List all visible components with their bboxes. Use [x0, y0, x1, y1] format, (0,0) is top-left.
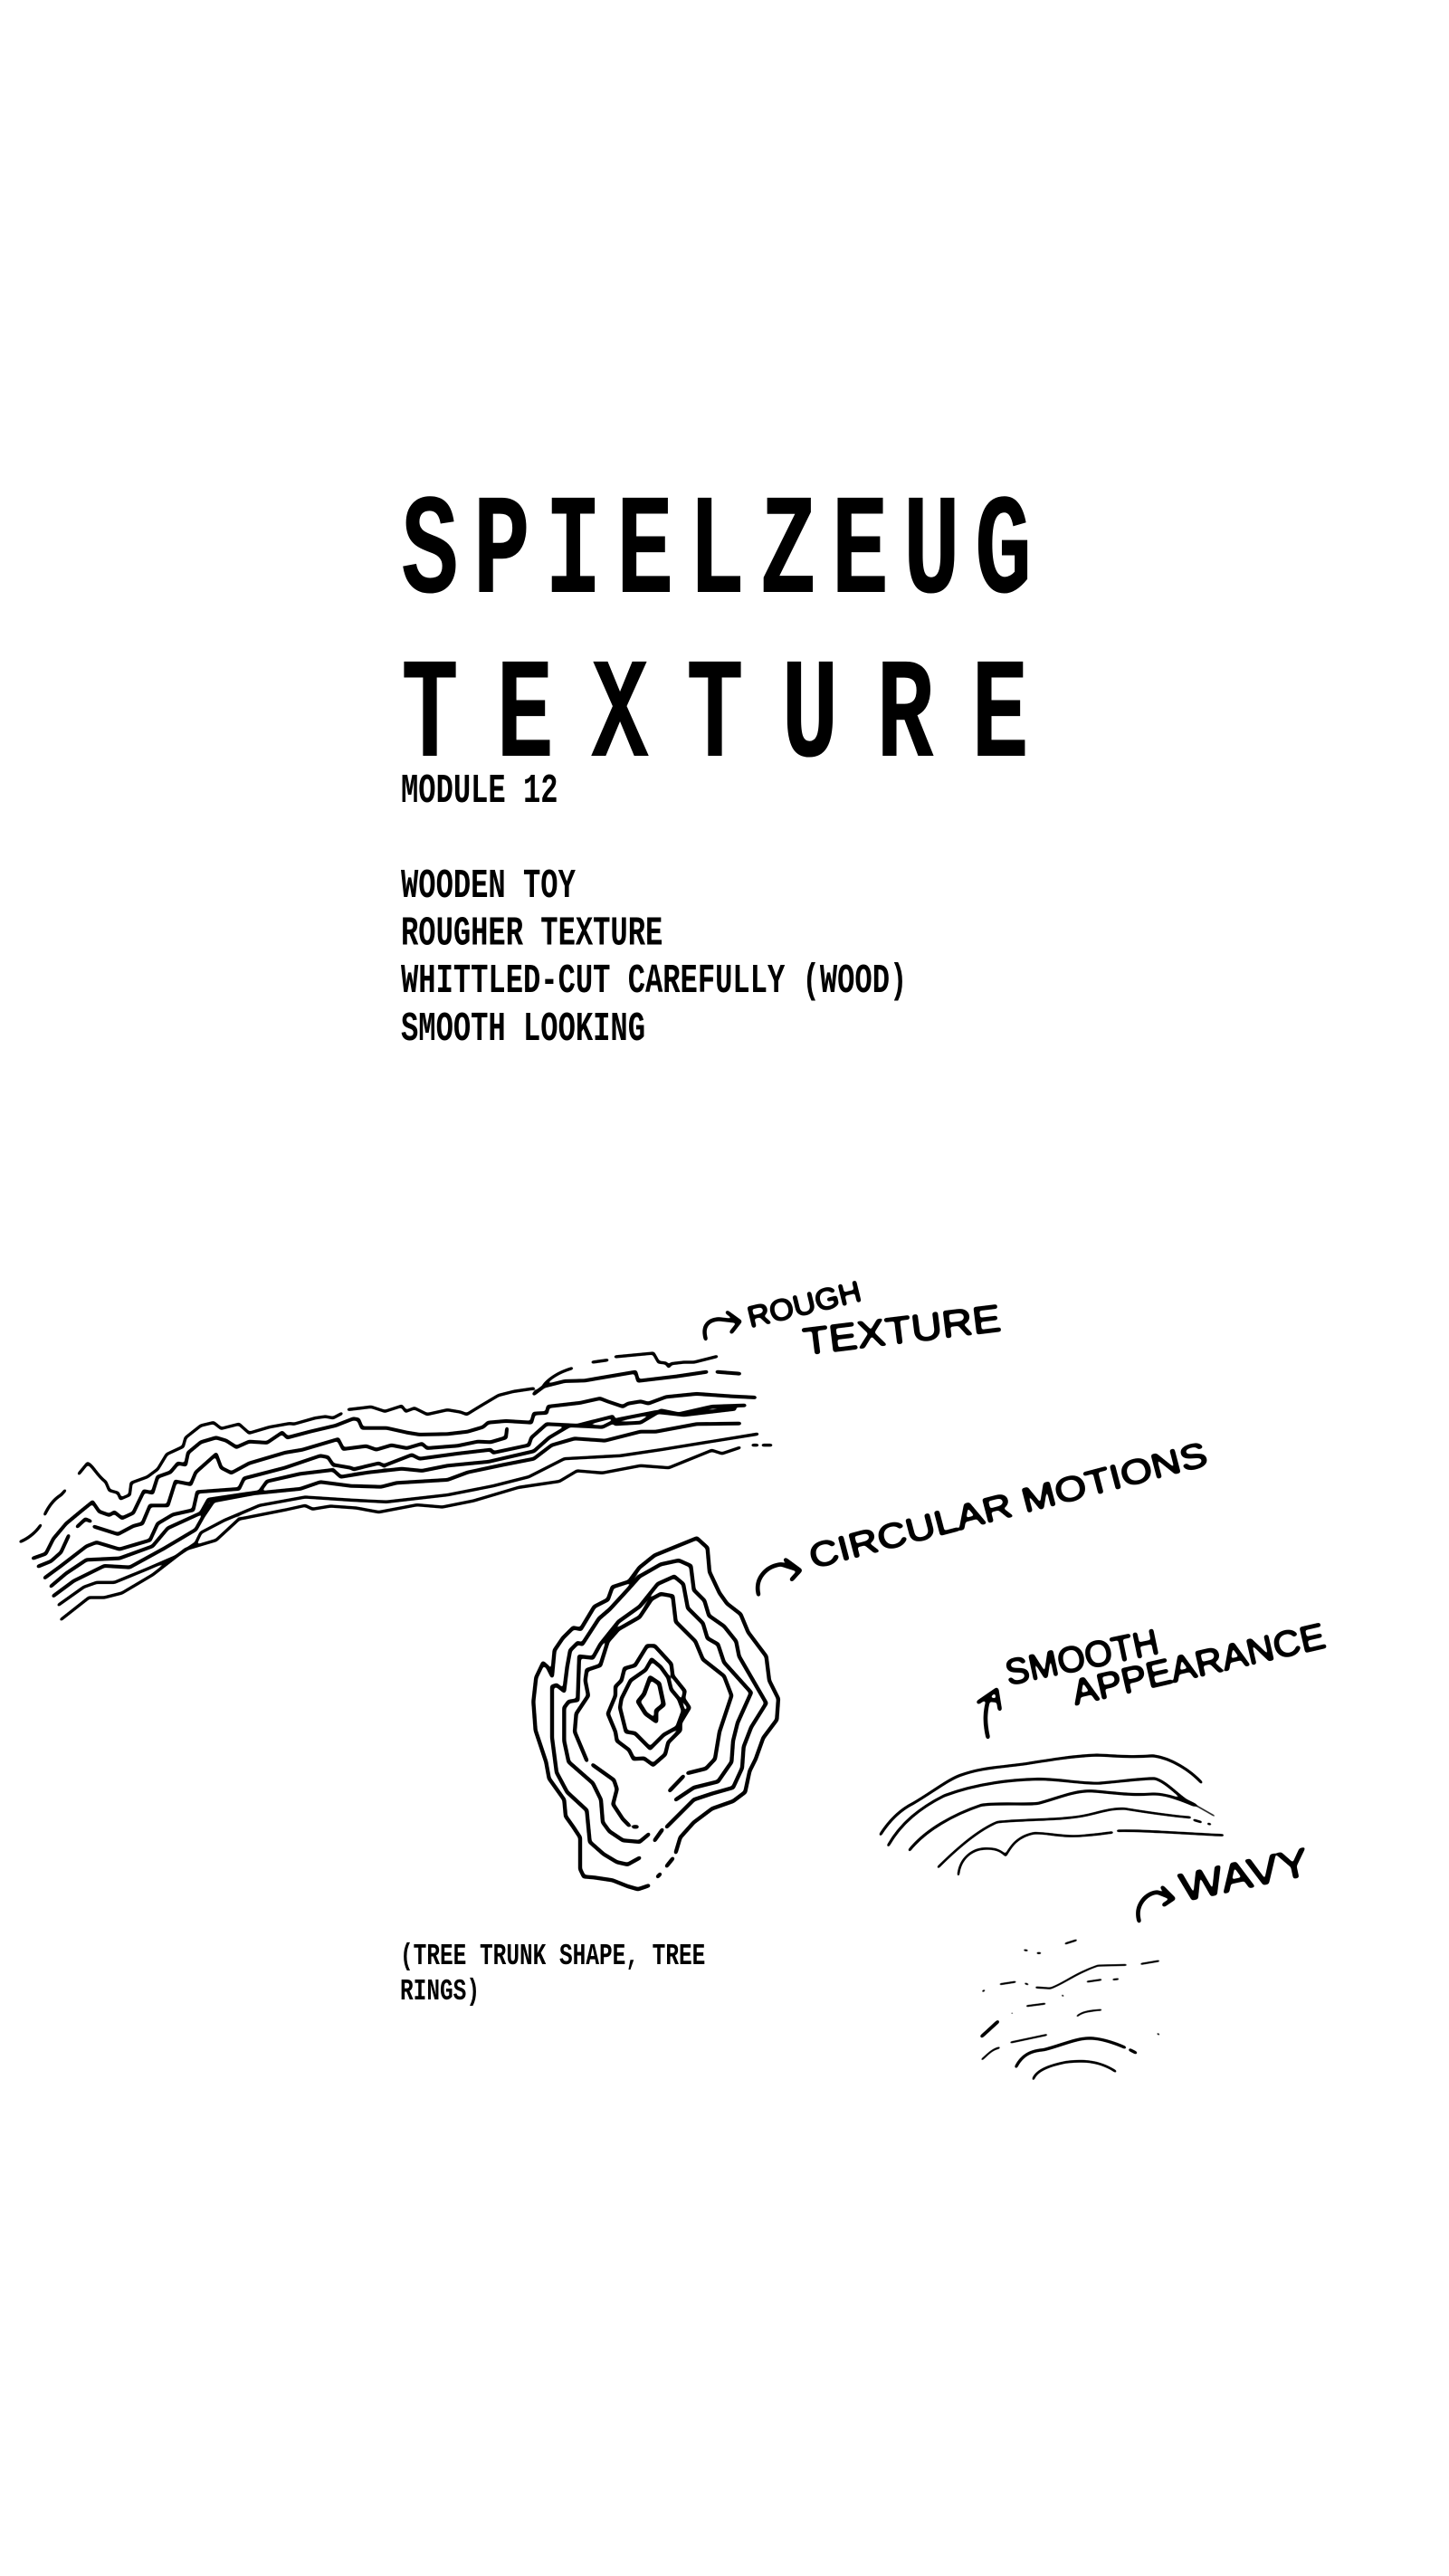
- sketch: wavy fragments: [982, 1940, 1159, 2079]
- handwritten label: rough texture: ROUGH: [744, 1274, 864, 1334]
- caption: tree trunk note: RINGS): [400, 1975, 480, 2008]
- title: Spielzeug Texture: TEXTURE: [401, 638, 1029, 799]
- text block: module notes: WHITTLED-CUT CAREFULLY (WOOD): [401, 958, 907, 1005]
- handwritten label: rough texture: TEXTURE: [800, 1296, 1003, 1363]
- handwritten label: smooth appearance: SMOOTH: [1002, 1622, 1162, 1693]
- sketch: smooth lines: [881, 1755, 1224, 1875]
- text block: module notes: SMOOTH LOOKING: [401, 1006, 645, 1053]
- handwritten label: circular motions: CIRCULAR MOTIONS: [806, 1436, 1211, 1577]
- handwritten label: wavy: WAVY: [1176, 1840, 1313, 1911]
- arrow: wavy: [1138, 1887, 1173, 1921]
- text block: module notes: ROUGHER TEXTURE: [401, 910, 663, 957]
- arrow: rough texture: [705, 1312, 739, 1339]
- arrow: circular motions: [758, 1560, 800, 1595]
- title: Spielzeug Texture: [401, 474, 1032, 799]
- sketch: tree rings: [533, 1538, 778, 1889]
- text block: module notes: WOODEN TOY: [401, 863, 576, 910]
- caption: tree trunk note: (TREE TRUNK SHAPE, TREE: [400, 1940, 705, 1973]
- text block: module notes: [401, 863, 907, 1053]
- title: Spielzeug Texture: SPIELZEUG: [401, 474, 1032, 635]
- sketch: rough texture lines: [20, 1353, 771, 1619]
- caption: tree trunk note: [400, 1940, 705, 2008]
- handwritten label: rough texture: [744, 1274, 1003, 1363]
- arrow: smooth appearance: [978, 1690, 1000, 1737]
- illustration: hand-drawn sketches and notes: [20, 1274, 1330, 2079]
- handwritten label: smooth appearance: APPEARANCE: [1068, 1617, 1330, 1713]
- subtitle: module number: MODULE 12: [401, 768, 558, 815]
